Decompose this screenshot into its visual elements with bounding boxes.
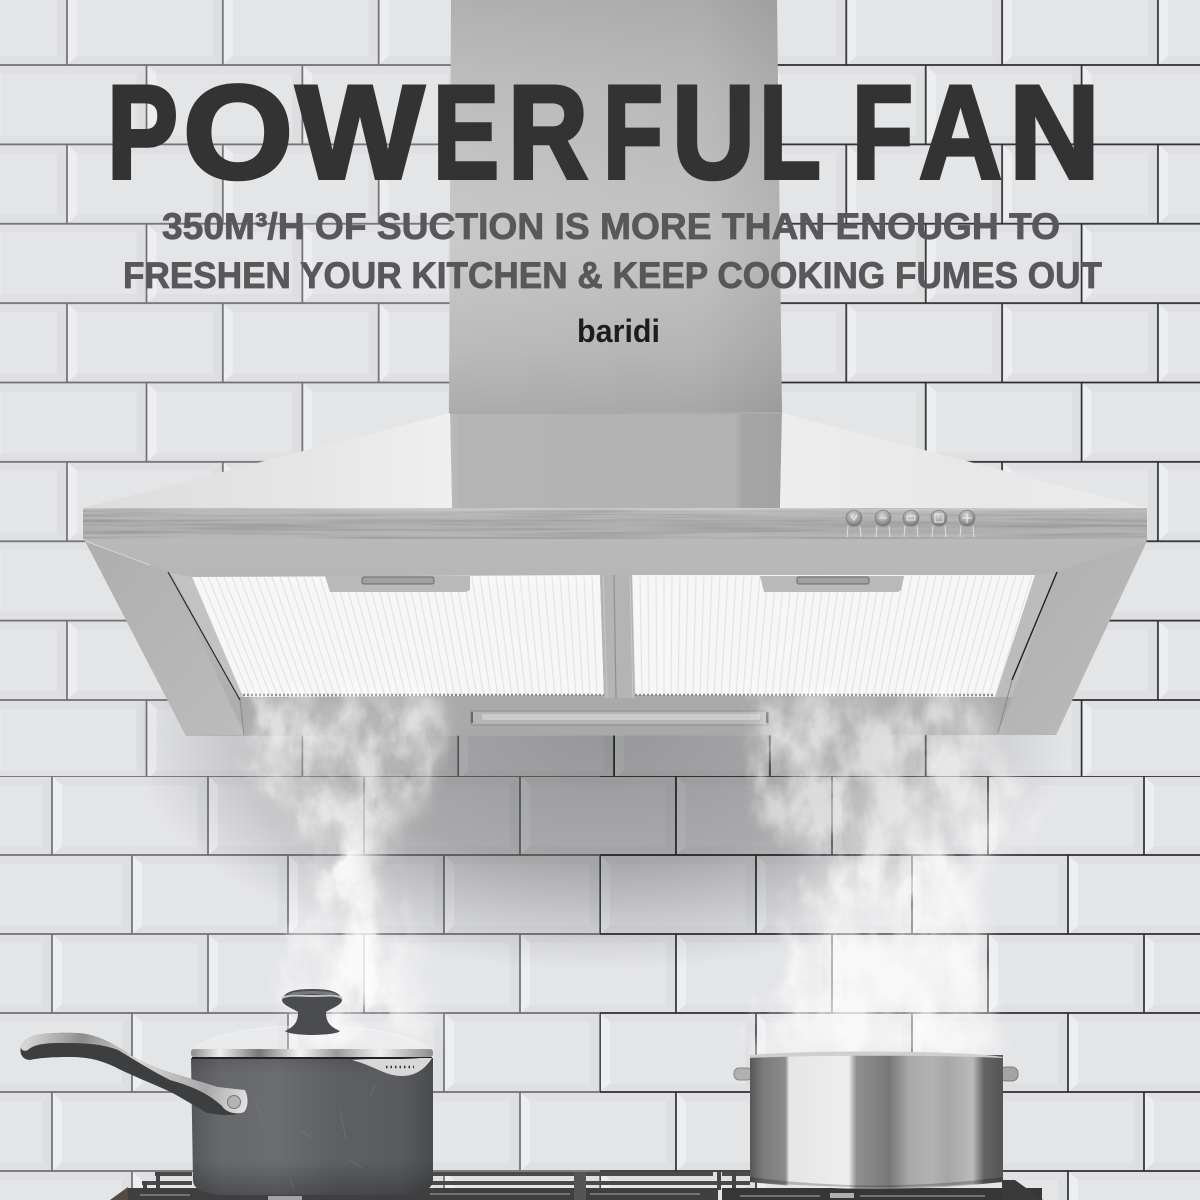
subtitle line two: FRESHEN YOUR KITCHEN & KEEP COOKING FUMES OUT <box>123 255 1102 296</box>
pot rim <box>750 1051 1003 1058</box>
range hood <box>83 413 1147 736</box>
soft steam glow left <box>255 700 446 1045</box>
saucepan with lid <box>20 989 433 1195</box>
cloudy steam right <box>750 698 1050 1055</box>
pan handle <box>20 1033 248 1115</box>
front band <box>83 508 1147 539</box>
subtitle line one: 350M³/H OF SUCTION IS MORE THAN ENOUGH TO <box>162 206 1060 247</box>
lid knob <box>282 989 342 1035</box>
title: F <box>603 59 663 207</box>
chimney <box>449 0 782 508</box>
centre divider <box>600 575 635 698</box>
baridi logo: baridi <box>577 313 660 349</box>
title: W <box>296 59 424 207</box>
cloudy steam left <box>250 698 449 1045</box>
pot base shading <box>750 1177 1003 1187</box>
pot side handles <box>734 1067 1018 1081</box>
filter handle right <box>760 576 904 592</box>
grease filter right <box>632 575 1035 697</box>
hood shadow on wall <box>130 700 1070 975</box>
grease filter left <box>192 575 604 697</box>
control buttons <box>846 510 975 537</box>
title: R <box>508 59 588 207</box>
title: O <box>183 59 293 207</box>
pouring spout <box>352 1058 432 1076</box>
pan body <box>191 1058 433 1195</box>
pot body <box>750 1055 1003 1189</box>
title: U <box>672 59 755 207</box>
stock pot <box>734 1051 1018 1189</box>
title: E <box>433 59 499 207</box>
filter handle left <box>325 576 470 592</box>
title: A <box>919 59 1002 207</box>
soft steam glow right <box>755 700 1040 1055</box>
light fixture <box>471 711 768 725</box>
title: F <box>852 59 913 207</box>
sloped hood canopy <box>83 413 1147 508</box>
stove grate <box>110 1172 1043 1200</box>
title: L <box>759 59 819 207</box>
title: N <box>1009 59 1100 207</box>
title: P <box>107 59 178 207</box>
lower frame <box>85 539 1147 736</box>
steam right <box>750 698 1050 1055</box>
steam left <box>250 698 449 1045</box>
pan rim <box>191 1049 433 1057</box>
glass lid <box>193 1026 430 1050</box>
